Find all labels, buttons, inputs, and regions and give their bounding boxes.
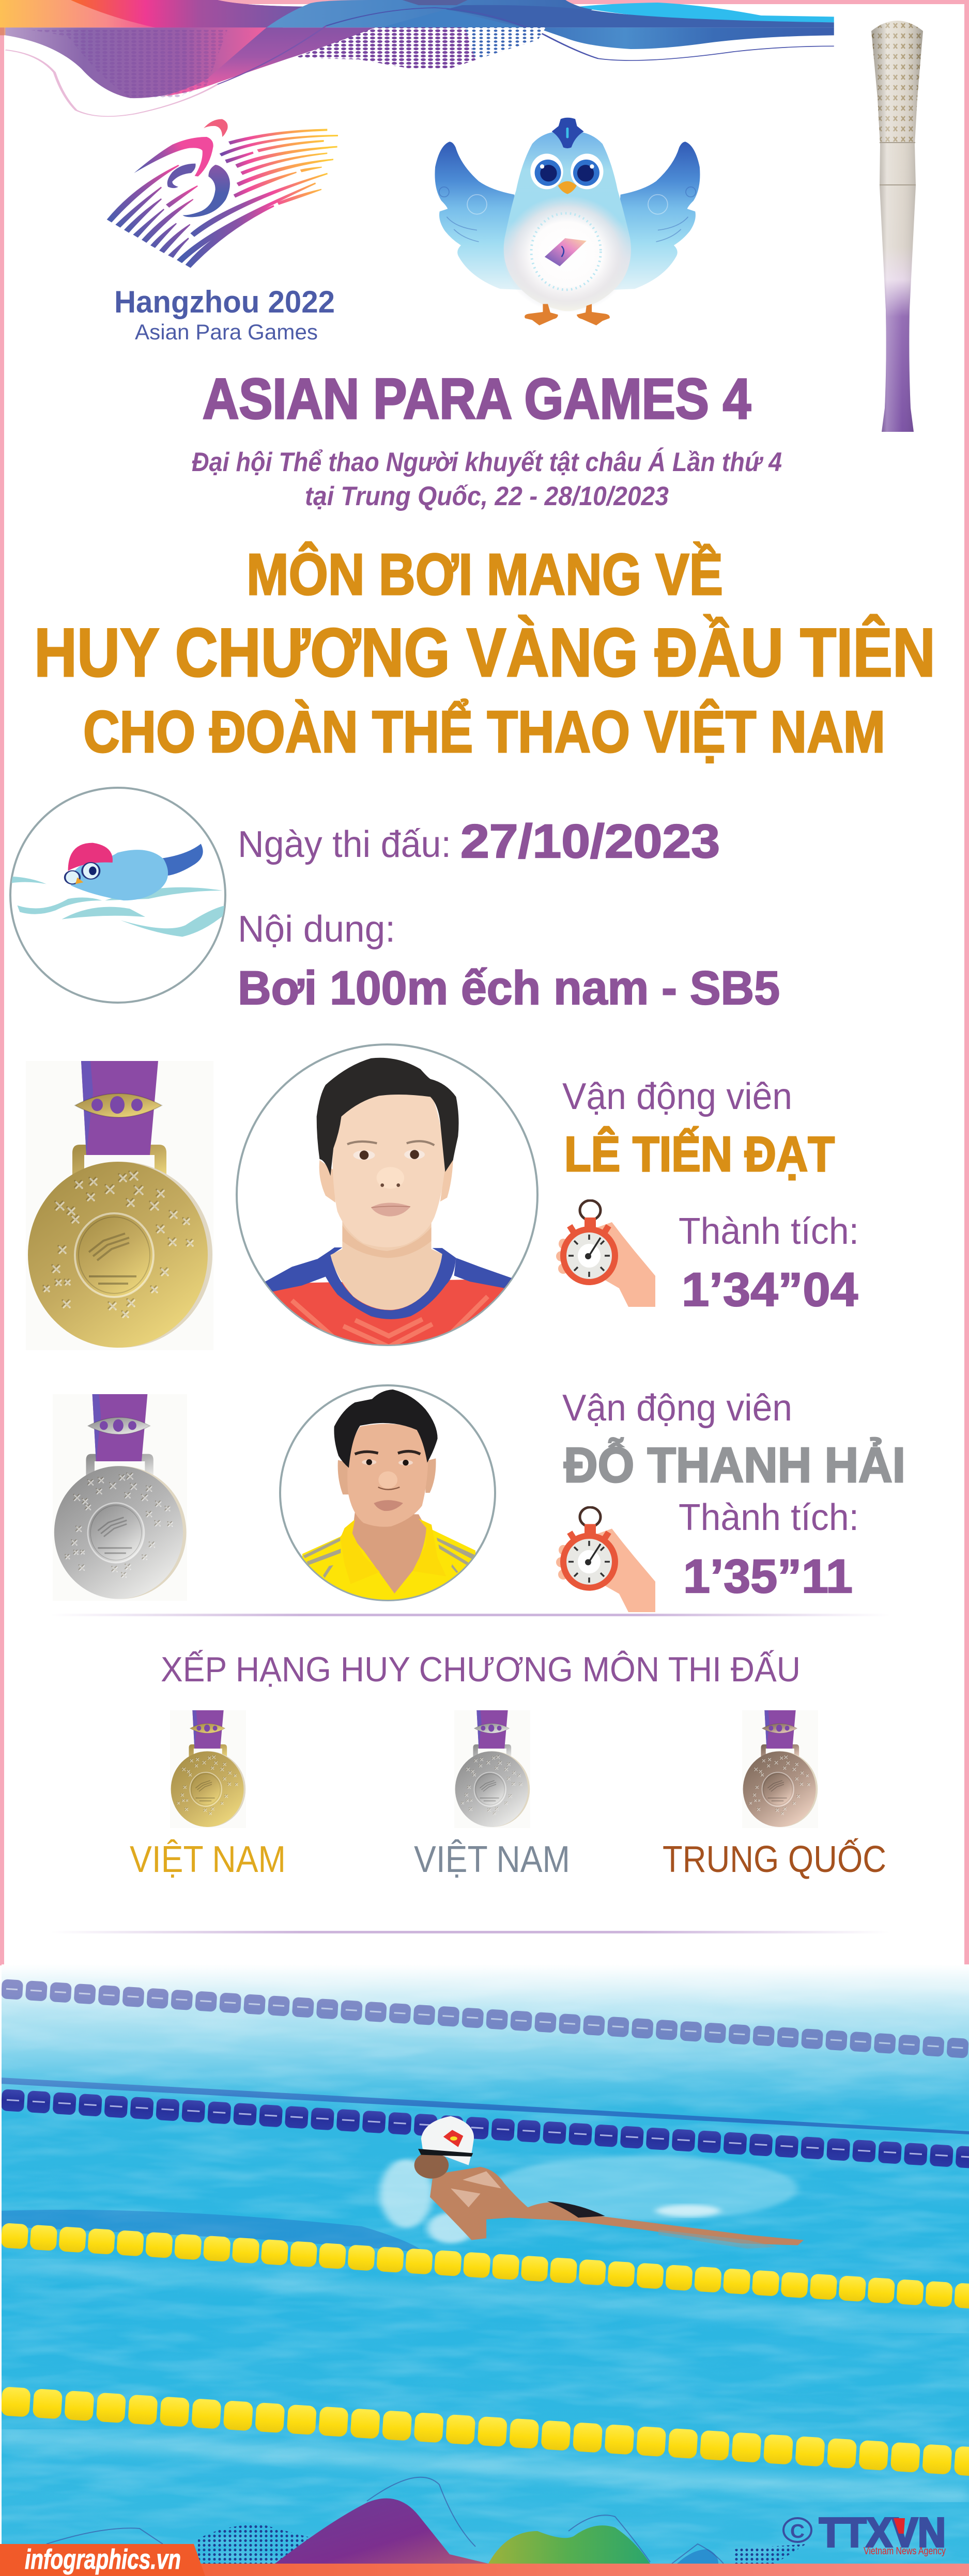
athlete 2 details: Vận động viên [562, 1387, 792, 1429]
bronze entry [663, 1710, 886, 1880]
athlete 1 details: 1’34”04 [682, 1263, 858, 1316]
crest [552, 118, 584, 148]
eyes [530, 153, 604, 189]
event title: ASIAN PARA GAMES 4 [203, 367, 751, 431]
logo wordmark: Hangzhou 2022 [114, 285, 335, 319]
gold entry: VIỆT NAM [130, 1839, 286, 1880]
main headline: MÔN BƠI MANG VỀ [247, 542, 723, 607]
beak [558, 181, 577, 194]
logo mark: left stripes [107, 165, 198, 258]
portrait: Đỗ Thanh Hải [280, 1385, 495, 1605]
athlete 2 details: Thành tích: [679, 1497, 859, 1538]
event subtitle: Đại hội Thể thao Người khuyết tật châu Á Lần thứ 4 [192, 447, 782, 477]
logo figure [134, 119, 230, 217]
main headline [34, 542, 935, 765]
site tab: infographics.vn [25, 2544, 181, 2575]
mascot [435, 118, 700, 325]
bronze entry: TRUNG QUỐC [663, 1838, 886, 1880]
bottom ribbon [0, 2564, 969, 2576]
feet [525, 304, 610, 325]
event subtitle [192, 447, 782, 511]
event subtitle: tại Trung Quốc, 22 - 28/10/2023 [305, 481, 669, 511]
TTXVN logo: C [790, 2521, 805, 2542]
TTXVN logo: Vietnam News Agency [864, 2546, 946, 2557]
match date: Ngày thi đấu: [238, 824, 451, 865]
wing swirls [439, 187, 696, 242]
athlete 1 details [562, 1076, 859, 1316]
splash [379, 2156, 798, 2243]
right wing [613, 142, 700, 290]
swimmer [379, 2116, 804, 2249]
logo mark: right stripes [220, 129, 338, 198]
event discipline: Nội dung: [238, 909, 395, 950]
gold medal [26, 1061, 213, 1350]
bird body [70, 850, 168, 900]
event discipline [238, 909, 780, 1014]
medal table [130, 1710, 886, 1880]
athlete 2 details [562, 1387, 905, 1603]
lane rope: yellow 1 [0, 2221, 969, 2315]
lane rope: yellow 2 [0, 2384, 969, 2482]
torch [871, 21, 923, 432]
goggles [65, 863, 100, 884]
swimming mascot icon [10, 788, 226, 1003]
medal table heading: XẾP HẠNG HUY CHƯƠNG MÔN THI ĐẤU [161, 1649, 801, 1689]
lane rope: navy [0, 2087, 969, 2174]
portrait: Lê Tiến Đạt [237, 1044, 537, 1352]
gold entry [130, 1710, 286, 1880]
stopwatch icon 2 [556, 1507, 655, 1612]
stopwatch icon 1 [556, 1200, 655, 1307]
match date: 27/10/2023 [460, 815, 720, 868]
athlete 1 details: Thành tích: [679, 1211, 859, 1252]
page border [0, 0, 969, 1965]
silver entry [414, 1710, 570, 1880]
waves [11, 877, 226, 936]
logo subtitle: Asian Para Games [135, 320, 318, 344]
swimming pool photo [0, 1964, 969, 2576]
decorative bottom hills [47, 2477, 806, 2564]
Hangzhou 2022 logo [107, 119, 338, 344]
TTXVN logo: TTXVN [819, 2509, 946, 2555]
header wave banner [0, 0, 834, 116]
match date [238, 815, 720, 868]
event discipline: Bơi 100m ếch nam - SB5 [238, 962, 780, 1014]
athlete 2 details: 1’35”11 [683, 1550, 853, 1603]
silver entry: VIỆT NAM [414, 1839, 570, 1880]
cap [68, 843, 113, 871]
athlete 1 details: Vận động viên [562, 1076, 792, 1117]
athlete 1 details: LÊ TIẾN ĐẠT [564, 1126, 835, 1182]
silver medal [53, 1394, 187, 1601]
belly emblem [545, 238, 587, 266]
belly [502, 195, 632, 313]
wing [162, 844, 203, 876]
athlete 2 details: ĐỖ THANH HẢI [564, 1437, 905, 1493]
body [504, 131, 631, 311]
left wing [435, 142, 521, 290]
logo mark: long stripes [177, 173, 328, 268]
lane rope: top [0, 1977, 969, 2065]
